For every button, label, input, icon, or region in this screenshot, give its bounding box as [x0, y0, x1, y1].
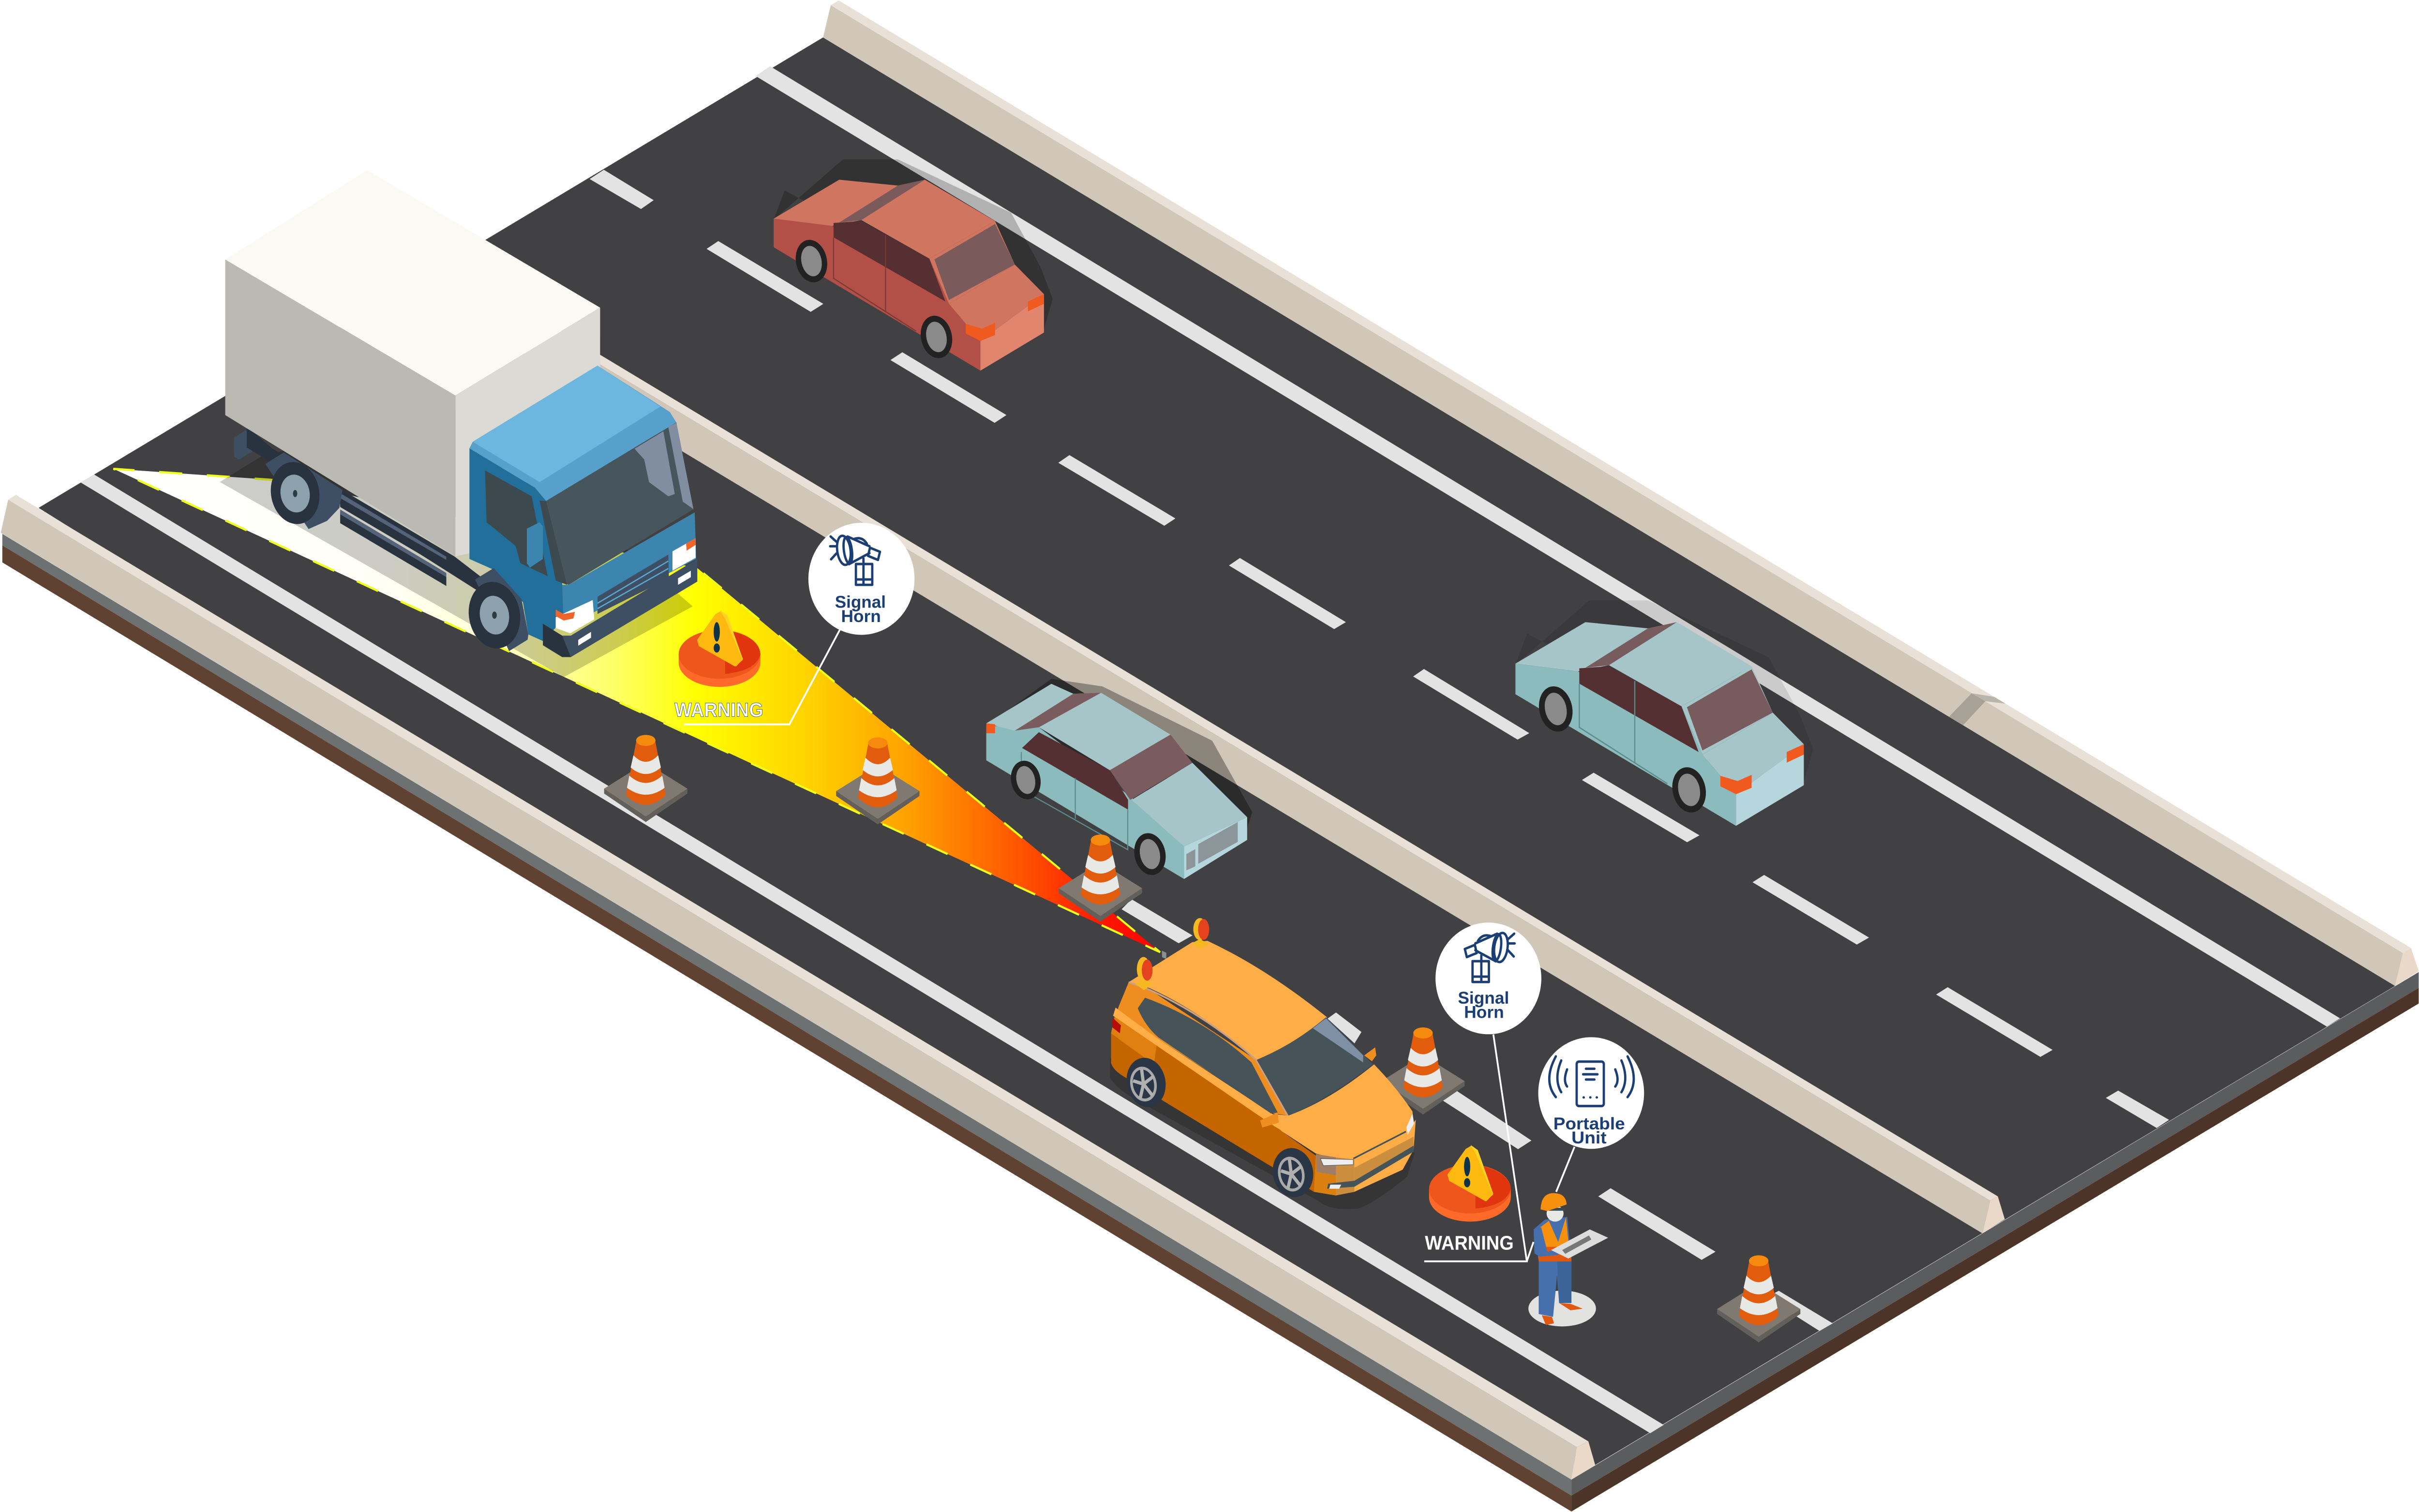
tablet: [1551, 1230, 1608, 1259]
mirrors: [1260, 1112, 1279, 1127]
side window: [1138, 998, 1278, 1113]
near barrier: [1, 495, 1595, 1480]
vest: [1538, 1217, 1571, 1261]
car shadow: [1110, 1058, 1415, 1209]
callout lines: signal horn on truck: [684, 629, 840, 725]
front beacon: [1135, 957, 1152, 990]
bubble: portable unit: [1538, 1037, 1644, 1149]
cab front face: [562, 512, 696, 628]
side window: [485, 471, 548, 576]
cone 3: [1059, 834, 1142, 921]
windshield: [539, 422, 693, 585]
rear wheel: [1121, 1053, 1170, 1112]
cone 1: [604, 735, 687, 822]
torso: [1534, 1217, 1571, 1261]
lower carriageway: centre dashes: [1121, 899, 1833, 1331]
ground disc: [1528, 1290, 1596, 1326]
cone 5: [1717, 1255, 1800, 1342]
bubble: signal horn on truck: [808, 523, 914, 635]
face and mask: [1546, 1205, 1564, 1222]
icon: portable unit: [1549, 1056, 1634, 1106]
rear beacon: [1192, 918, 1209, 949]
headlights: [1112, 1017, 1414, 1189]
front wheel: [463, 568, 528, 653]
upper carriageway: centre dashes: [590, 170, 2169, 1128]
label: WARNING on truck side: WARNING: [674, 699, 763, 721]
road base: side faces: [2, 534, 2419, 1512]
trousers: [1538, 1259, 1571, 1317]
upper carriageway: solid edge line: [756, 66, 2340, 1026]
hood: [1275, 1065, 1413, 1159]
warning beam from orange car to truck: [113, 469, 1160, 952]
windshield: [1257, 1017, 1373, 1115]
lower body: [1111, 1012, 1316, 1192]
signal horn sensor: [1162, 950, 1166, 959]
median barrier: [524, 309, 2005, 1233]
cargo box: [225, 170, 600, 556]
car: teal next to median: [986, 679, 1252, 879]
icon: signal horn: [1465, 932, 1515, 982]
bubble: signal horn on truck: Signal: [835, 593, 886, 612]
bubble: portable unit: Portable: [1553, 1114, 1625, 1133]
cab side: [469, 448, 564, 641]
side skirts: [340, 493, 447, 586]
helmet: [1540, 1193, 1567, 1211]
rear wheel: [265, 453, 343, 529]
bumper: [543, 559, 697, 657]
cone 4: [1381, 1027, 1464, 1114]
icon: signal horn: [830, 535, 880, 585]
orange car: [1110, 918, 1416, 1209]
car: teal on far lane: [1515, 600, 1813, 826]
far barrier: [823, 0, 2419, 986]
truck shadow: [220, 407, 693, 677]
worker with portable unit: [1528, 1193, 1608, 1326]
belt highlight: [1113, 1008, 1289, 1132]
truck chassis: [234, 430, 254, 460]
truck: [225, 170, 697, 657]
front wheel: [1268, 1143, 1318, 1202]
roof: [1129, 941, 1327, 1060]
cab roof: [469, 366, 676, 501]
bumper: [1314, 1120, 1416, 1195]
grille: [597, 555, 669, 614]
arm: [1534, 1227, 1558, 1257]
boots: [1542, 1315, 1554, 1325]
headlights: [556, 538, 696, 633]
upper body: [1117, 982, 1289, 1115]
mirror: [527, 522, 543, 567]
bubble: signal horn on worker side: Signal: [1458, 989, 1509, 1008]
bubble: signal horn on worker side: Horn: [1464, 1003, 1504, 1022]
warning sign near worker: [1429, 1145, 1511, 1222]
label: WARNING near worker: WARNING: [1425, 1232, 1514, 1254]
lower carriageway: solid edge line: [81, 474, 1664, 1433]
bubble: portable unit: Unit: [1571, 1128, 1607, 1147]
warning sign on beam: [679, 610, 761, 687]
cone 2: [836, 737, 920, 825]
car: red: [774, 159, 1053, 371]
bubble: signal horn on truck: Horn: [841, 607, 881, 626]
bubble: signal horn on worker side: [1435, 922, 1541, 1034]
callout lines: worker: [1424, 1035, 1574, 1261]
